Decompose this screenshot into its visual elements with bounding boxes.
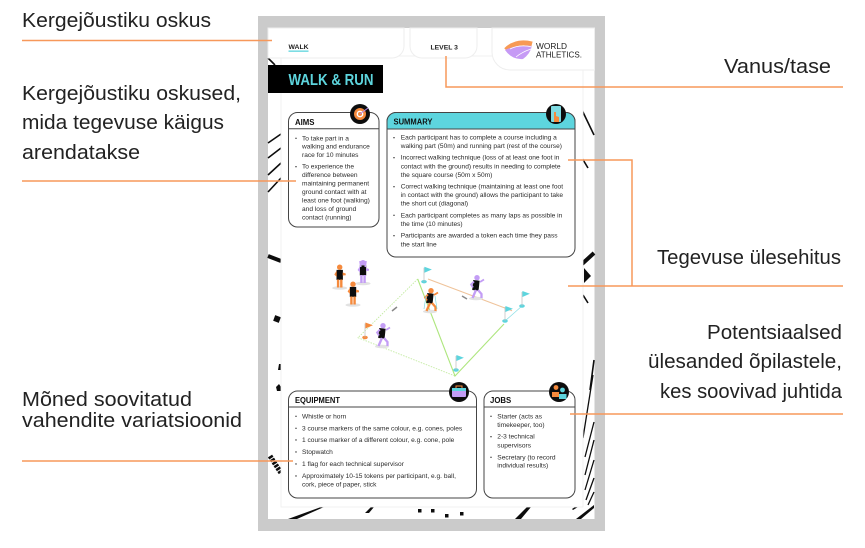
text: jobs list: Secretary (to record xyxy=(497,454,556,461)
text: equipment list: 1 flag for each technical supervisor xyxy=(302,461,405,468)
poster frame xyxy=(258,16,605,531)
text: equipment list: 3 course markers of the same colour, e.g. cones, poles xyxy=(302,425,463,432)
text: aims list: ground contact with at xyxy=(302,189,367,196)
annotation: Vanus/tase: Vanus/tase xyxy=(724,56,831,78)
text: aims list: walking and endurance xyxy=(301,144,370,151)
annotation: Kergejõustiku oskus: Kergejõustiku oskus xyxy=(22,10,211,32)
annotation: Potentsiaalsed ülesanded õpilastele, kes soovivad juhtida: Potentsiaalsed xyxy=(707,322,842,344)
text: aims list: To experience the xyxy=(302,164,354,171)
tab: LEVEL 3: LEVEL 3 xyxy=(430,44,458,52)
panel: jobs xyxy=(484,382,575,498)
text: aims list: least one foot (walking) xyxy=(302,197,370,204)
annotation: Potentsiaalsed ülesanded õpilastele, kes soovivad juhtida: ülesanded õpilastele, xyxy=(648,351,842,373)
text: summary list: the square course (50m x 50m) xyxy=(401,172,492,179)
text: summary list: in contact with the ground) allows the participant to take xyxy=(401,192,563,199)
annotation: Potentsiaalsed ülesanded õpilastele, kes soovivad juhtida xyxy=(648,322,843,403)
text: jobs list: 2-3 technical xyxy=(497,434,535,441)
text: equipment list xyxy=(295,413,463,488)
text: aims list: difference between xyxy=(302,172,358,179)
course diagram xyxy=(332,260,530,376)
text: equipment list: Approximately 10-15 tokens per participant, e.g. ball, xyxy=(302,473,456,480)
text: summary list: Each participant has to complete a course including a xyxy=(401,135,557,142)
tab: World Athletics logo xyxy=(492,28,594,70)
text: aims list: contact (running) xyxy=(302,214,351,221)
annotation: Mõned soovitatud vahendite variatsioonid: vahendite variatsioonid xyxy=(22,410,242,432)
icon: target xyxy=(350,104,370,124)
title: WALK & RUN: WALK & RUN xyxy=(288,72,374,89)
panel: aims xyxy=(288,104,379,227)
annotation: Kergejõustiku oskused, mida tegevuse käigus arendatakse: mida tegevuse käigus xyxy=(22,112,224,134)
text: jobs list xyxy=(490,413,556,470)
text: jobs list: timekeeper, too) xyxy=(497,422,545,429)
text: aims list: and loss of ground xyxy=(302,206,357,213)
panel: equipment xyxy=(288,382,476,498)
tab: LEVEL 3 xyxy=(410,28,477,58)
text: jobs list: Starter (acts as xyxy=(497,413,543,420)
icon: toolbox xyxy=(449,382,469,402)
text: aims list xyxy=(295,135,370,221)
text: summary list: the start line xyxy=(401,241,437,248)
tab: skill WALK: WALK xyxy=(288,44,309,51)
annotation: Kergejõustiku oskused, mida tegevuse käigus arendatakse xyxy=(22,83,241,164)
panel: aims: AIMS xyxy=(295,118,314,127)
annotation: Kergejõustiku oskused, mida tegevuse käigus arendatakse: arendatakse xyxy=(22,142,140,164)
poster xyxy=(258,16,605,531)
text: aims list: maintaining permanent xyxy=(302,181,369,188)
text: equipment list: Whistle or horn xyxy=(302,413,347,420)
text: jobs list: individual results) xyxy=(497,463,548,470)
icon: people xyxy=(549,382,569,402)
text: summary list: Incorrect walking technique (loss of at least one foot in xyxy=(401,155,560,162)
text: summary list: walking part (50m) and running part (rest of the course) xyxy=(400,143,562,150)
text: equipment list: Stopwatch xyxy=(302,449,333,456)
tab: skill WALK xyxy=(268,28,404,58)
panel: jobs: JOBS xyxy=(490,396,511,405)
annotation: Potentsiaalsed ülesanded õpilastele, kes soovivad juhtida: kes soovivad juhtida xyxy=(660,381,843,403)
annotation: Mõned soovitatud vahendite variatsioonid: Mõned soovitatud xyxy=(22,389,192,411)
text: jobs list: supervisors xyxy=(497,442,532,449)
text: summary list: the time (10 minutes) xyxy=(401,221,463,228)
text: equipment list: 1 course marker of a different colour, e.g. cone, pole xyxy=(302,437,455,444)
panel: summary: SUMMARY xyxy=(394,118,433,126)
tab: World Athletics logo: ATHLETICS. xyxy=(536,50,582,60)
text: equipment list: cork, piece of paper, stick xyxy=(302,481,377,488)
panel: summary xyxy=(387,104,575,257)
panel: equipment: EQUIPMENT xyxy=(295,396,340,405)
text: aims list: race for 10 minutes xyxy=(302,152,359,159)
text: aims list: To take part in a xyxy=(302,135,349,142)
text: summary list: Each participant completes as many laps as possible in xyxy=(401,212,563,219)
title: WALK & RUN xyxy=(268,65,383,93)
text: summary list: contact with the ground) results in needing to complete xyxy=(401,163,561,170)
annotation: Kergejõustiku oskused, mida tegevuse käigus arendatakse: Kergejõustiku oskused, xyxy=(22,83,241,105)
text: summary list xyxy=(393,135,563,248)
text: summary list: the short cut (diagonal) xyxy=(401,201,468,208)
annotation: Tegevuse ülesehitus: Tegevuse ülesehitus xyxy=(657,247,841,269)
annotation: Mõned soovitatud vahendite variatsioonid xyxy=(22,389,242,432)
leader lines xyxy=(22,40,843,461)
icon: tablet xyxy=(546,104,566,124)
text: summary list: Correct walking technique (maintaining at least one foot xyxy=(401,184,563,191)
tab: World Athletics logo: WORLD xyxy=(536,41,567,51)
text: summary list: Participants are awarded a token each time they pass xyxy=(401,233,558,240)
